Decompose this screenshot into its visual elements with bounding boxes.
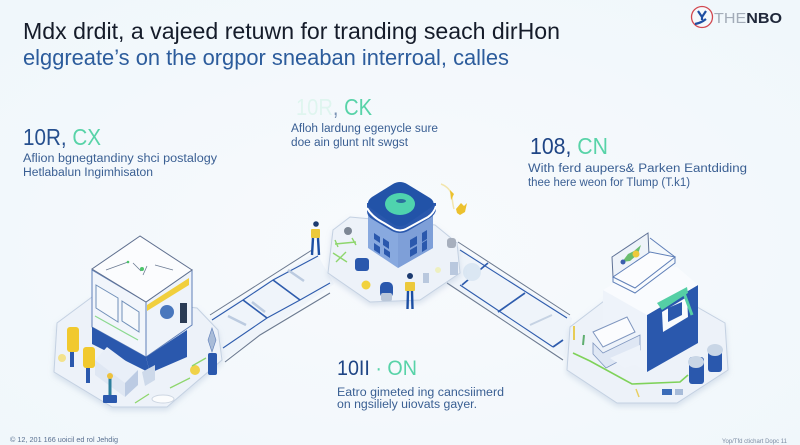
icon: yellow sparkle decoration [441,184,467,215]
text block: bottom stat: on ngsiliely uiovats gayer. [337,399,477,411]
icon: left platform details [58,327,217,403]
text block: left stat: Hetlabalun Ingimhisaton [23,167,153,179]
text block: bottom stat: 10II · ON [337,357,417,380]
text block: right stat [528,133,747,189]
footer left: © 12, 201 166 uoicil ed rol Jehdig [10,436,118,444]
text block: center stat: doe ain glunt nlt swgst [291,137,409,149]
text block: center stat: 10R, CK [296,94,373,120]
icon: person left [311,221,320,255]
icon: center building [367,182,436,268]
icon: right building [593,233,698,372]
text block: center stat: Afloh lardung egenycle sure [291,123,438,135]
text block: right stat: 108, CN [530,133,608,159]
subtitle: elggreate’s on the orgpor sneaban interroal, calles [23,45,509,70]
icon: person right [405,273,415,309]
text block: right stat: thee here weon for Tlump (T.k1) [528,177,690,189]
text block: left stat [23,124,217,179]
panel: right platform [567,285,728,403]
logo: THENBO [714,10,782,27]
text block: bottom stat: Eatro gimeted ing cancsiimerd [337,387,504,399]
title: Mdx drdit, a vajeed retuwn for tranding seach dirHon [23,18,560,44]
panel: center platform [328,217,460,302]
icon: left building [92,236,192,397]
text block: left stat: 10R, CX [23,124,101,150]
logo [692,6,782,28]
icon: center platform details [333,227,458,301]
text block: center stat [291,94,438,149]
text block: left stat: Aflion bgnegtandiny shci postalogy [23,153,217,165]
panel: left platform [54,297,222,407]
walkway: center to right [445,242,572,360]
text block: right stat: With ferd aupers& Parken Eantdiding [528,163,747,175]
icon: right platform details [573,326,723,397]
text block: bottom stat [337,357,504,411]
walkway: left to center [210,250,334,362]
footer right: Yop/Tfd ctichart Dopc 11 [722,438,787,445]
